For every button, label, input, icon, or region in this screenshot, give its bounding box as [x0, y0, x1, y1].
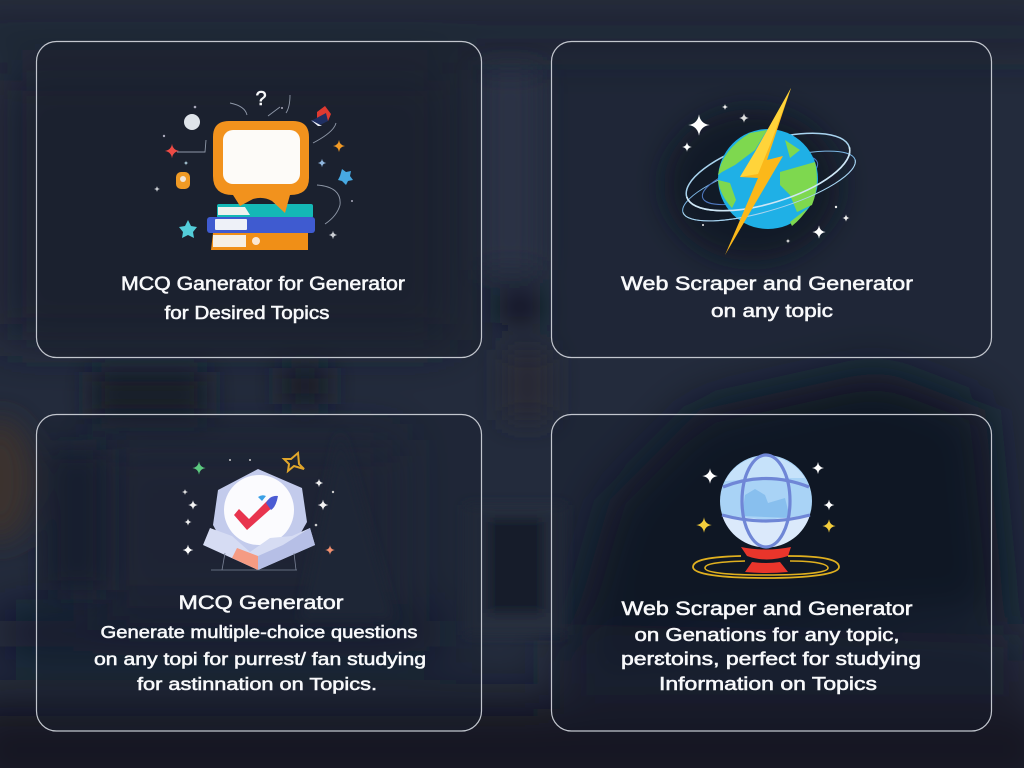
description: Generate multiple-choice questions [100, 622, 418, 642]
icon: speech bubble on stack of books [154, 88, 353, 250]
question mark: ? [255, 88, 267, 110]
description [94, 622, 426, 694]
heading: Web Scraper and Generator [622, 598, 913, 620]
heading: Web Scraper and Generator [621, 273, 914, 295]
description: Information on Topics [659, 674, 877, 694]
subheading: for Desired Topics [164, 303, 330, 323]
icon: checkmark badge in open box [182, 453, 335, 570]
subheading: on any topic [711, 300, 833, 321]
icon: crystal globe on red stand [693, 455, 839, 578]
description: for astinnation on Topics. [137, 674, 377, 694]
panel: Web Scraper and Generator on any topic [552, 42, 992, 358]
heading: MCQ Generator [178, 592, 344, 614]
description: perɛtoins, perfect for studying [621, 649, 921, 669]
heading: MCQ Ganerator for Generator [121, 274, 406, 295]
description: on Genations for any topic, [634, 625, 900, 645]
description [621, 625, 921, 694]
panel: MCQ Generator description [36, 414, 482, 731]
description: on any topi for purrest/ fan studying [94, 649, 426, 669]
icon: globe with lightning bolt and orbit rings [676, 88, 862, 255]
panel: MCQ Generator for Desired Topics [36, 42, 482, 358]
panel: Web Scraper description [552, 414, 992, 731]
